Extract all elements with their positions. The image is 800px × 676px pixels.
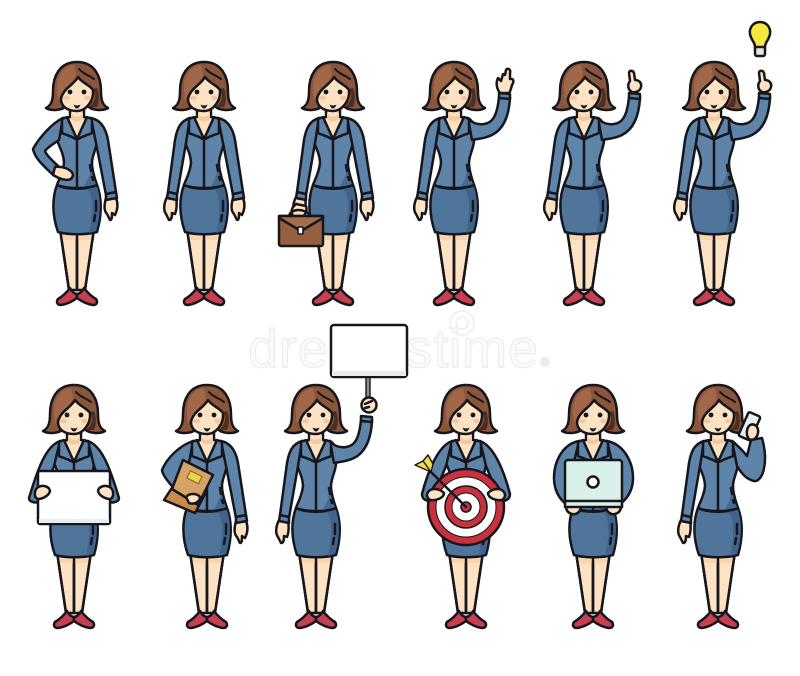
sign board <box>38 471 110 524</box>
arms <box>29 441 119 502</box>
icon: book <box>164 460 213 513</box>
icon: target with arrow <box>415 455 505 545</box>
figure: holding briefcase <box>279 62 373 305</box>
figure: pointing up <box>544 62 641 305</box>
figure: holding laptop <box>554 385 633 628</box>
hands <box>35 486 113 499</box>
figure: holding placard <box>276 325 407 628</box>
left arm on hip <box>33 118 73 180</box>
figure: holding target <box>415 385 510 628</box>
watermark: dreamstime: dreamstime <box>248 319 538 379</box>
arms <box>554 441 633 508</box>
raised arm <box>732 438 765 481</box>
left arm <box>162 441 195 500</box>
icon: laptop <box>565 460 622 514</box>
icon: phone <box>738 412 761 441</box>
figure: waving <box>414 62 513 305</box>
figure: on the phone <box>678 385 765 628</box>
figure: idea <box>674 62 771 305</box>
placard <box>331 325 407 412</box>
figure: standing <box>164 62 244 305</box>
arms <box>422 441 510 501</box>
icon: briefcase <box>279 204 323 246</box>
icon: light bulb <box>750 22 770 56</box>
figure: holding blank sign <box>29 385 119 628</box>
figure: hand on hip <box>33 62 117 305</box>
figure: holding book <box>162 385 247 628</box>
